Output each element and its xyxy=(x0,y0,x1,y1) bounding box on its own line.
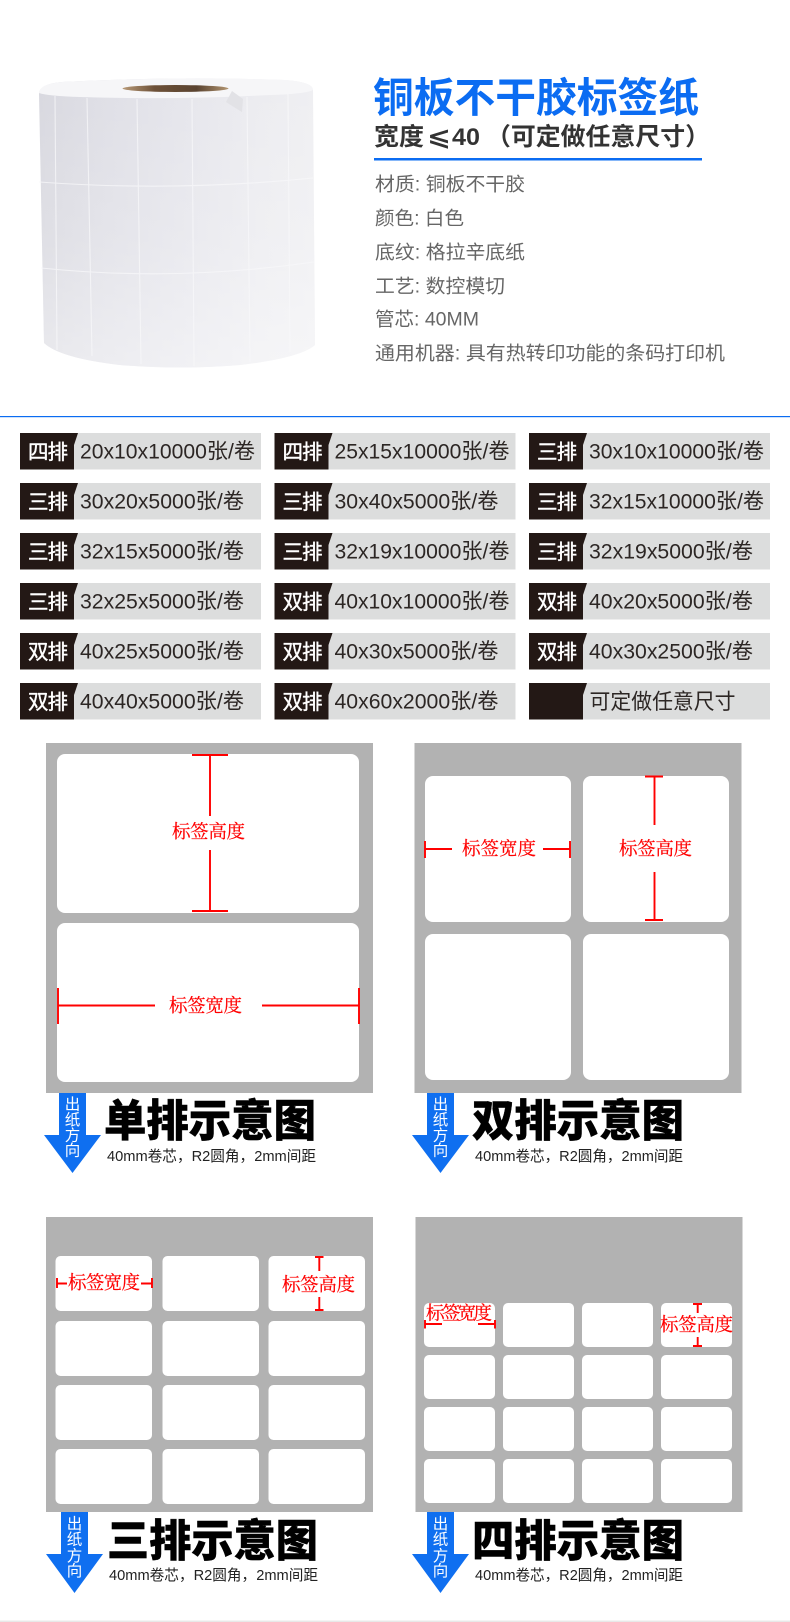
text block: product specifications: 工艺: 数控模切 xyxy=(375,276,505,298)
size cell: 32x19x5000: 32x19x5000张/卷 xyxy=(589,540,753,564)
size cell: custom size: 可定做任意尺寸 xyxy=(590,690,736,714)
arrow: paper direction quadruple: 纸 xyxy=(433,1530,448,1548)
size cell: custom size xyxy=(529,683,770,720)
size cell: 40x30x5000: 双排 xyxy=(282,641,322,664)
height dimension xyxy=(315,1257,324,1310)
caption: single-row: 40mm卷芯，R2圆角，2mm间距 xyxy=(107,1148,316,1165)
size table xyxy=(20,433,770,720)
size cell: 32x19x5000 xyxy=(529,533,770,570)
size cell: 30x20x5000: 三排 xyxy=(28,491,68,514)
size cell: 40x10x10000: 40x10x10000张/卷 xyxy=(334,590,510,614)
arrow: paper direction quadruple: 方 xyxy=(433,1547,448,1565)
width dimension xyxy=(58,988,359,1024)
panel: quadruple-row diagram xyxy=(416,1217,742,1512)
title: 铜板不干胶标签纸 xyxy=(373,75,699,121)
size cell: 32x15x10000: 32x15x10000张/卷 xyxy=(589,490,764,514)
size cell: 32x19x5000: 三排 xyxy=(537,541,577,564)
text block: product specifications: 管芯: 40MM xyxy=(375,308,479,330)
size cell: 30x40x5000 xyxy=(274,483,516,520)
panel: triple-row diagram xyxy=(46,1217,373,1512)
arrow: paper direction double: 出 xyxy=(433,1096,448,1114)
panel: single-row diagram xyxy=(46,743,373,1093)
size cell: 40x30x2500: 40x30x2500张/卷 xyxy=(589,640,753,664)
caption: double-row: 40mm卷芯，R2圆角，2mm间距 xyxy=(475,1148,683,1165)
height dimension xyxy=(693,1304,702,1346)
height dimension xyxy=(192,755,228,911)
size cell: 32x15x5000: 三排 xyxy=(28,541,68,564)
size cell: 32x25x5000: 32x25x5000张/卷 xyxy=(80,590,244,614)
caption: quadruple-row: 40mm卷芯，R2圆角，2mm间距 xyxy=(475,1567,683,1584)
size cell: 25x15x10000 xyxy=(274,433,516,470)
size cell: 40x20x5000 xyxy=(529,583,770,620)
size cell: 40x40x5000: 40x40x5000张/卷 xyxy=(80,690,244,714)
size cell: 32x19x10000 xyxy=(274,533,516,570)
width dimension xyxy=(57,1278,152,1288)
caption: triple-row: 40mm卷芯，R2圆角，2mm间距 xyxy=(109,1567,318,1584)
size cell: 40x40x5000 xyxy=(20,683,261,720)
size cell: 32x15x5000 xyxy=(20,533,261,570)
heading: quadruple-row: 四排示意图 xyxy=(472,1517,684,1566)
size cell: 30x20x5000: 30x20x5000张/卷 xyxy=(80,490,244,514)
size cell: 30x10x10000: 30x10x10000张/卷 xyxy=(589,440,764,464)
size cell: 40x30x2500: 双排 xyxy=(537,641,577,664)
size cell: 40x30x2500 xyxy=(529,633,770,670)
arrow: paper direction triple: 向 xyxy=(67,1562,82,1580)
size cell: 40x10x10000: 双排 xyxy=(282,591,322,614)
width label: 标签宽度 xyxy=(169,996,242,1017)
size cell: 40x25x5000: 40x25x5000张/卷 xyxy=(80,640,244,664)
subtitle: 40 xyxy=(452,124,480,151)
size cell: 30x40x5000: 三排 xyxy=(282,491,322,514)
size cell: 20x10x10000: 20x10x10000张/卷 xyxy=(80,440,255,464)
arrow: paper direction triple: 出 xyxy=(67,1515,82,1533)
height dimension xyxy=(645,776,663,920)
subtitle: （可定做任意尺寸） xyxy=(486,122,710,151)
size cell: 40x25x5000: 双排 xyxy=(28,641,68,664)
panel: double-row diagram xyxy=(414,743,742,1093)
arrow: paper direction single xyxy=(44,1093,101,1173)
size cell: 32x25x5000 xyxy=(20,583,261,620)
width label: 标签宽度 xyxy=(462,839,536,860)
arrow: paper direction triple: 纸 xyxy=(67,1530,82,1548)
size cell: 40x30x5000 xyxy=(274,633,516,670)
height label: 标签高度 xyxy=(660,1315,733,1336)
width label: 标签宽度 xyxy=(68,1273,140,1294)
height label: 标签高度 xyxy=(619,839,692,860)
size cell: 30x10x10000 xyxy=(529,433,770,470)
width label: 标签宽度 xyxy=(426,1304,492,1324)
size cell: 40x60x2000: 40x60x2000张/卷 xyxy=(334,690,498,714)
arrow: paper direction triple: 方 xyxy=(67,1547,82,1565)
arrow: paper direction single: 出 xyxy=(65,1096,80,1114)
subtitle: ⩽ xyxy=(427,122,451,151)
size cell: 32x19x10000: 三排 xyxy=(282,541,322,564)
size cell: 25x15x10000: 四排 xyxy=(282,441,322,464)
size cell: 30x20x5000 xyxy=(20,483,261,520)
text block: product specifications: 材质: 铜板不干胶 xyxy=(375,174,525,196)
width dimension xyxy=(425,841,570,858)
size cell: 40x40x5000: 双排 xyxy=(28,691,68,714)
title underline xyxy=(374,158,702,160)
size cell: 20x10x10000 xyxy=(20,433,261,470)
heading: double-row: 双排示意图 xyxy=(472,1097,684,1146)
arrow: paper direction single: 纸 xyxy=(65,1111,80,1129)
size cell: 32x19x10000: 32x19x10000张/卷 xyxy=(334,540,510,564)
icon: label roll photo xyxy=(39,78,315,368)
size cell: 40x10x10000 xyxy=(274,583,516,620)
height label: 标签高度 xyxy=(282,1275,355,1296)
size cell: 30x10x10000: 三排 xyxy=(537,441,577,464)
size cell: 40x30x5000: 40x30x5000张/卷 xyxy=(334,640,498,664)
text block: product specifications: 通用机器: 具有热转印功能的条码打印机 xyxy=(375,342,725,364)
text block: product specifications xyxy=(375,174,725,364)
arrow: paper direction quadruple: 出 xyxy=(433,1515,448,1533)
arrow: paper direction single: 方 xyxy=(65,1126,80,1144)
arrow: paper direction quadruple xyxy=(412,1512,469,1593)
size cell: 32x15x10000: 三排 xyxy=(537,491,577,514)
heading: triple-row: 三排示意图 xyxy=(107,1517,318,1566)
size cell: 30x40x5000: 30x40x5000张/卷 xyxy=(334,490,498,514)
text block: product specifications: 底纹: 格拉辛底纸 xyxy=(375,242,525,264)
size cell: 25x15x10000: 25x15x10000张/卷 xyxy=(334,440,510,464)
size cell: 40x60x2000: 双排 xyxy=(282,691,322,714)
divider line xyxy=(0,416,790,417)
size cell: 32x15x5000: 32x15x5000张/卷 xyxy=(80,540,244,564)
arrow: paper direction double: 向 xyxy=(433,1142,448,1160)
arrow: paper direction double xyxy=(412,1093,469,1173)
arrow: paper direction quadruple: 向 xyxy=(433,1562,448,1580)
arrow: paper direction double: 纸 xyxy=(433,1111,448,1129)
heading: single-row: 单排示意图 xyxy=(104,1097,316,1146)
subtitle xyxy=(374,122,710,151)
size cell: 40x25x5000 xyxy=(20,633,261,670)
size cell: 32x25x5000: 三排 xyxy=(28,591,68,614)
height label: 标签高度 xyxy=(172,822,245,843)
arrow: paper direction triple xyxy=(46,1512,103,1593)
arrow: paper direction double: 方 xyxy=(433,1126,448,1144)
size cell: 40x20x5000: 40x20x5000张/卷 xyxy=(589,590,753,614)
subtitle: 宽度 xyxy=(374,123,424,151)
text block: product specifications: 颜色: 白色 xyxy=(375,208,464,230)
size cell: 32x15x10000 xyxy=(529,483,770,520)
size cell: 40x20x5000: 双排 xyxy=(537,591,577,614)
arrow: paper direction single: 向 xyxy=(65,1142,80,1160)
size cell: 20x10x10000: 四排 xyxy=(28,441,68,464)
size cell: 40x60x2000 xyxy=(274,683,516,720)
width dimension xyxy=(425,1320,495,1328)
